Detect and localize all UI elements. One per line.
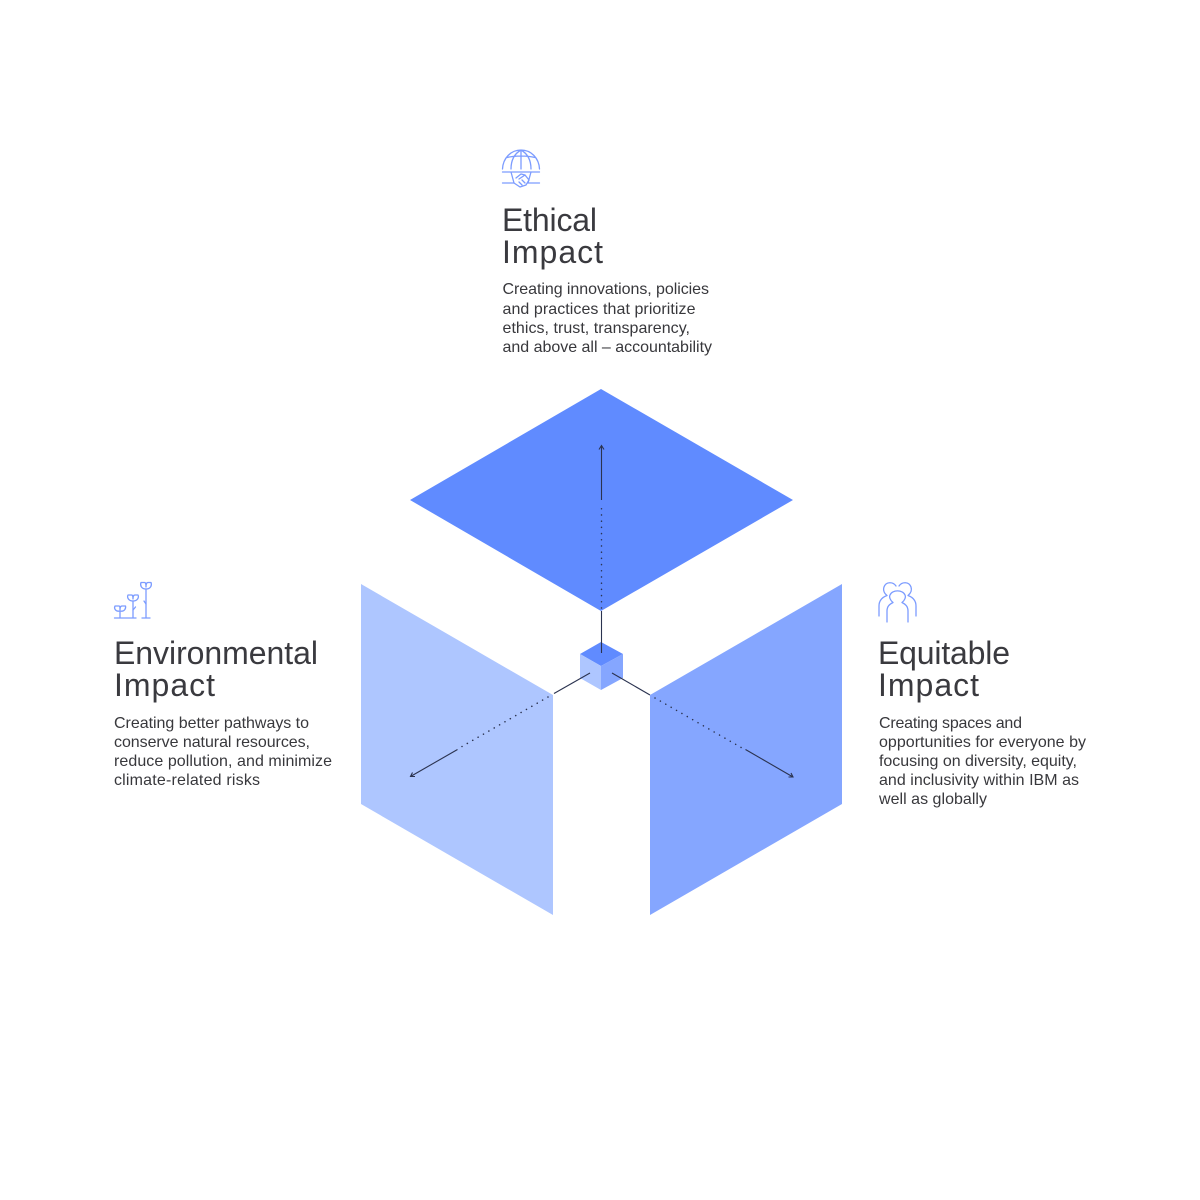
text block: and above all – accountability bbox=[502, 339, 712, 356]
panel: left face bbox=[361, 584, 553, 915]
icon: three people bbox=[879, 583, 916, 622]
text block: climate-related risks bbox=[114, 772, 260, 789]
text block: well as globally bbox=[878, 791, 987, 808]
heading bbox=[502, 202, 603, 270]
text block: focusing on diversity, equity, bbox=[879, 753, 1077, 770]
panel: ethical impact bbox=[502, 150, 712, 356]
heading: Environmental bbox=[114, 635, 318, 671]
arrow: right to equitable bbox=[612, 673, 793, 777]
heading: Impact bbox=[114, 667, 215, 703]
diagram: exploded cube bbox=[361, 389, 842, 915]
icon: central cube bbox=[580, 642, 623, 690]
text block bbox=[878, 715, 1086, 808]
panel: equitable impact bbox=[878, 583, 1086, 808]
heading bbox=[878, 635, 1010, 703]
text block: Creating spaces and bbox=[879, 715, 1022, 732]
text block: Creating better pathways to bbox=[114, 715, 309, 732]
panel: right face bbox=[650, 584, 842, 915]
text block: and inclusivity within IBM as bbox=[879, 772, 1079, 789]
text block: conserve natural resources, bbox=[114, 734, 310, 751]
panel: environmental impact bbox=[114, 582, 332, 789]
text block: opportunities for everyone by bbox=[879, 734, 1086, 751]
heading: Ethical bbox=[502, 202, 597, 238]
icon: globe and handshake bbox=[502, 150, 540, 187]
text block: Creating innovations, policies bbox=[502, 281, 709, 298]
heading bbox=[114, 635, 318, 703]
icon: seedlings bbox=[114, 582, 151, 618]
heading: Impact bbox=[878, 667, 979, 703]
text block: ethics, trust, transparency, bbox=[502, 320, 690, 337]
heading: Equitable bbox=[878, 635, 1010, 671]
arrow: left to environmental bbox=[410, 673, 590, 776]
arrow: up to ethical bbox=[599, 446, 604, 653]
text block: and practices that prioritize bbox=[502, 301, 696, 318]
text block: reduce pollution, and minimize bbox=[114, 753, 332, 770]
text block bbox=[502, 281, 712, 356]
text block bbox=[114, 715, 332, 789]
heading: Impact bbox=[502, 234, 603, 270]
panel: top diamond bbox=[410, 389, 793, 611]
